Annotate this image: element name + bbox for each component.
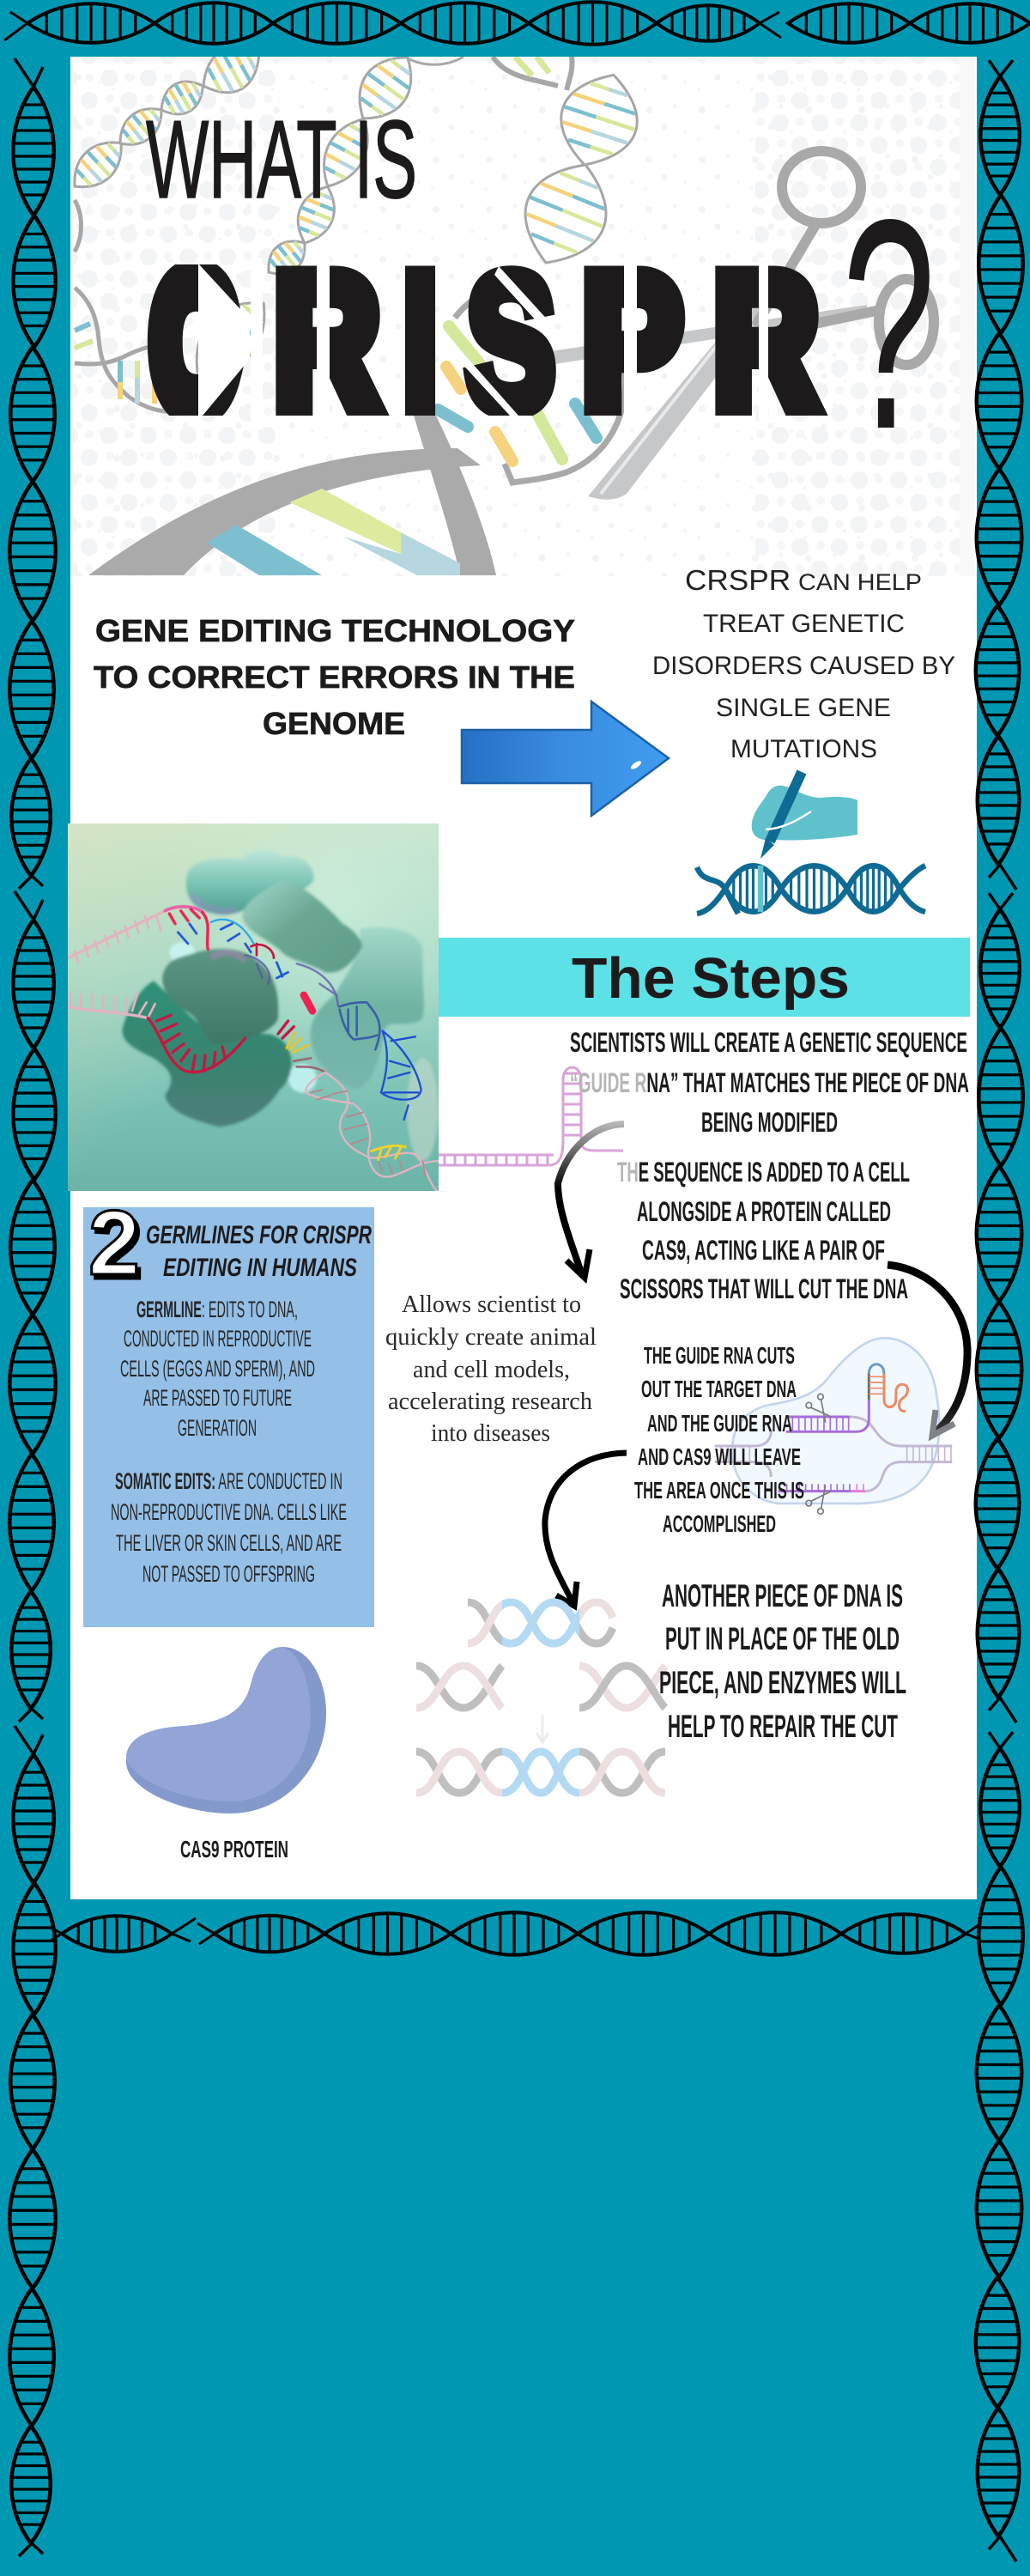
germline definition: GERMLINE: EDITS TO DNA, <box>136 1297 298 1322</box>
text: crispr can help treat: MUTATIONS <box>730 735 877 763</box>
somatic definition: NON-REPRODUCTIVE DNA. CELLS LIKE <box>111 1499 347 1525</box>
title: what is: WHAT IS <box>146 98 417 222</box>
big dna lower left <box>88 448 481 575</box>
heading bar: the steps: The Steps <box>572 946 850 1011</box>
text: step 1 <box>570 1027 969 1138</box>
somatic definition: THE LIVER OR SKIN CELLS, AND ARE <box>116 1530 342 1556</box>
caption: cas9 protein: CAS9 PROTEIN <box>180 1836 288 1862</box>
diagram: dna replacement <box>416 1602 665 1793</box>
dna border: left <box>9 58 56 2556</box>
text: step 3: AND CAS9 WILL LEAVE <box>638 1443 801 1470</box>
text: allows scientist: and cell models, <box>413 1356 570 1383</box>
text: step 4 <box>659 1578 906 1744</box>
germlines heading: GERMLINES FOR CRISPR <box>146 1221 372 1249</box>
dna chain centre <box>267 57 464 275</box>
title: crispr <box>148 258 828 421</box>
text: crispr can help treat: CRSPR CAN HELP <box>685 564 922 596</box>
heading bar: the steps <box>439 938 970 1017</box>
germline definition: GENERATION <box>178 1415 257 1441</box>
title: crispr: R <box>274 234 380 451</box>
germline definition: ARE PASSED TO FUTURE <box>143 1385 292 1411</box>
germline definition: CELLS (EGGS AND SPERM), AND <box>120 1356 315 1382</box>
illustration: cas9 protein <box>126 1647 326 1814</box>
text: step 3: ACCOMPLISHED <box>663 1510 776 1537</box>
germline definition: CONDUCTED IN REPRODUCTIVE <box>124 1326 312 1352</box>
text: crispr can help treat: DISORDERS CAUSED BY <box>652 652 955 680</box>
big dna helix right <box>491 57 639 264</box>
diagram: cas9 cell cutting dna <box>715 1338 952 1514</box>
dna border: top <box>4 2 1030 45</box>
somatic definition <box>111 1468 347 1587</box>
title: crispr: I <box>403 234 437 451</box>
dna middle right <box>579 1666 665 1708</box>
scissors <box>545 151 934 500</box>
icon: hand with pen <box>752 772 857 859</box>
text: allows scientist <box>385 1291 597 1447</box>
left swirl dna <box>73 199 167 414</box>
icon: dna strand <box>697 866 925 914</box>
dna border: right <box>976 60 1023 2561</box>
title: crispr: C <box>152 234 235 451</box>
germlines heading: EDITING IN HUMANS <box>163 1254 357 1282</box>
arrow: to diagram <box>888 1265 967 1436</box>
guide rna hairpin <box>439 1067 623 1165</box>
dna chain top left <box>73 57 260 189</box>
text: gene editing technology: TO CORRECT ERRORS IN THE <box>94 659 575 695</box>
text: allows scientist: into diseases <box>431 1419 550 1447</box>
dna top row <box>468 1602 613 1643</box>
arrow: to scientist note <box>558 1124 624 1278</box>
text: crispr can help treat: TREAT GENETIC <box>703 610 905 638</box>
image: cas9 dna complex <box>68 823 439 1191</box>
text: crispr can help treat <box>652 564 955 763</box>
centre dna <box>455 279 625 483</box>
text: step 3: THE GUIDE RNA CUTS <box>644 1342 795 1369</box>
text: crispr can help treat: SINGLE GENE <box>716 694 891 722</box>
text: step 3: AND THE GUIDE RNA <box>647 1410 792 1437</box>
title: question mark: ? <box>842 157 936 491</box>
germlines heading <box>146 1221 372 1282</box>
text: step 3 <box>634 1342 804 1537</box>
dna bottom row <box>416 1752 665 1793</box>
title: crispr: S <box>466 234 555 451</box>
somatic definition: NOT PASSED TO OFFSPRING <box>142 1561 315 1587</box>
text: gene editing technology <box>94 613 575 741</box>
text: step 1: BEING MODIFIED <box>701 1107 838 1138</box>
small down arrow <box>536 1715 548 1742</box>
germline definition <box>120 1297 315 1441</box>
title: crispr: R <box>713 234 819 451</box>
arrow: to dna repair <box>545 1453 627 1606</box>
text: allows scientist: Allows scientist to <box>402 1291 581 1318</box>
arrow: blue <box>462 702 669 816</box>
text: gene editing technology: GENE EDITING TECHNOLOGY <box>95 613 575 648</box>
text: step 3: OUT THE TARGET DNA <box>641 1376 797 1402</box>
text: allows scientist: accelerating research <box>388 1388 592 1415</box>
text: step 3: THE AREA ONCE THIS IS <box>634 1477 804 1504</box>
text: gene editing technology: GENOME <box>263 706 405 741</box>
panel: germlines <box>83 1191 374 1627</box>
white content panel <box>70 57 977 1899</box>
dna middle left <box>416 1666 502 1708</box>
text: allows scientist: quickly create animal <box>385 1323 597 1351</box>
hero illustration: dna and scissors <box>63 36 977 576</box>
somatic definition: SOMATIC EDITS: ARE CONDUCTED IN <box>115 1468 342 1494</box>
germlines numeral: 2 <box>88 1191 140 1294</box>
text: step 2 <box>617 1157 910 1304</box>
title: crispr: P <box>582 234 682 451</box>
dna border: bottom <box>52 1912 981 1955</box>
